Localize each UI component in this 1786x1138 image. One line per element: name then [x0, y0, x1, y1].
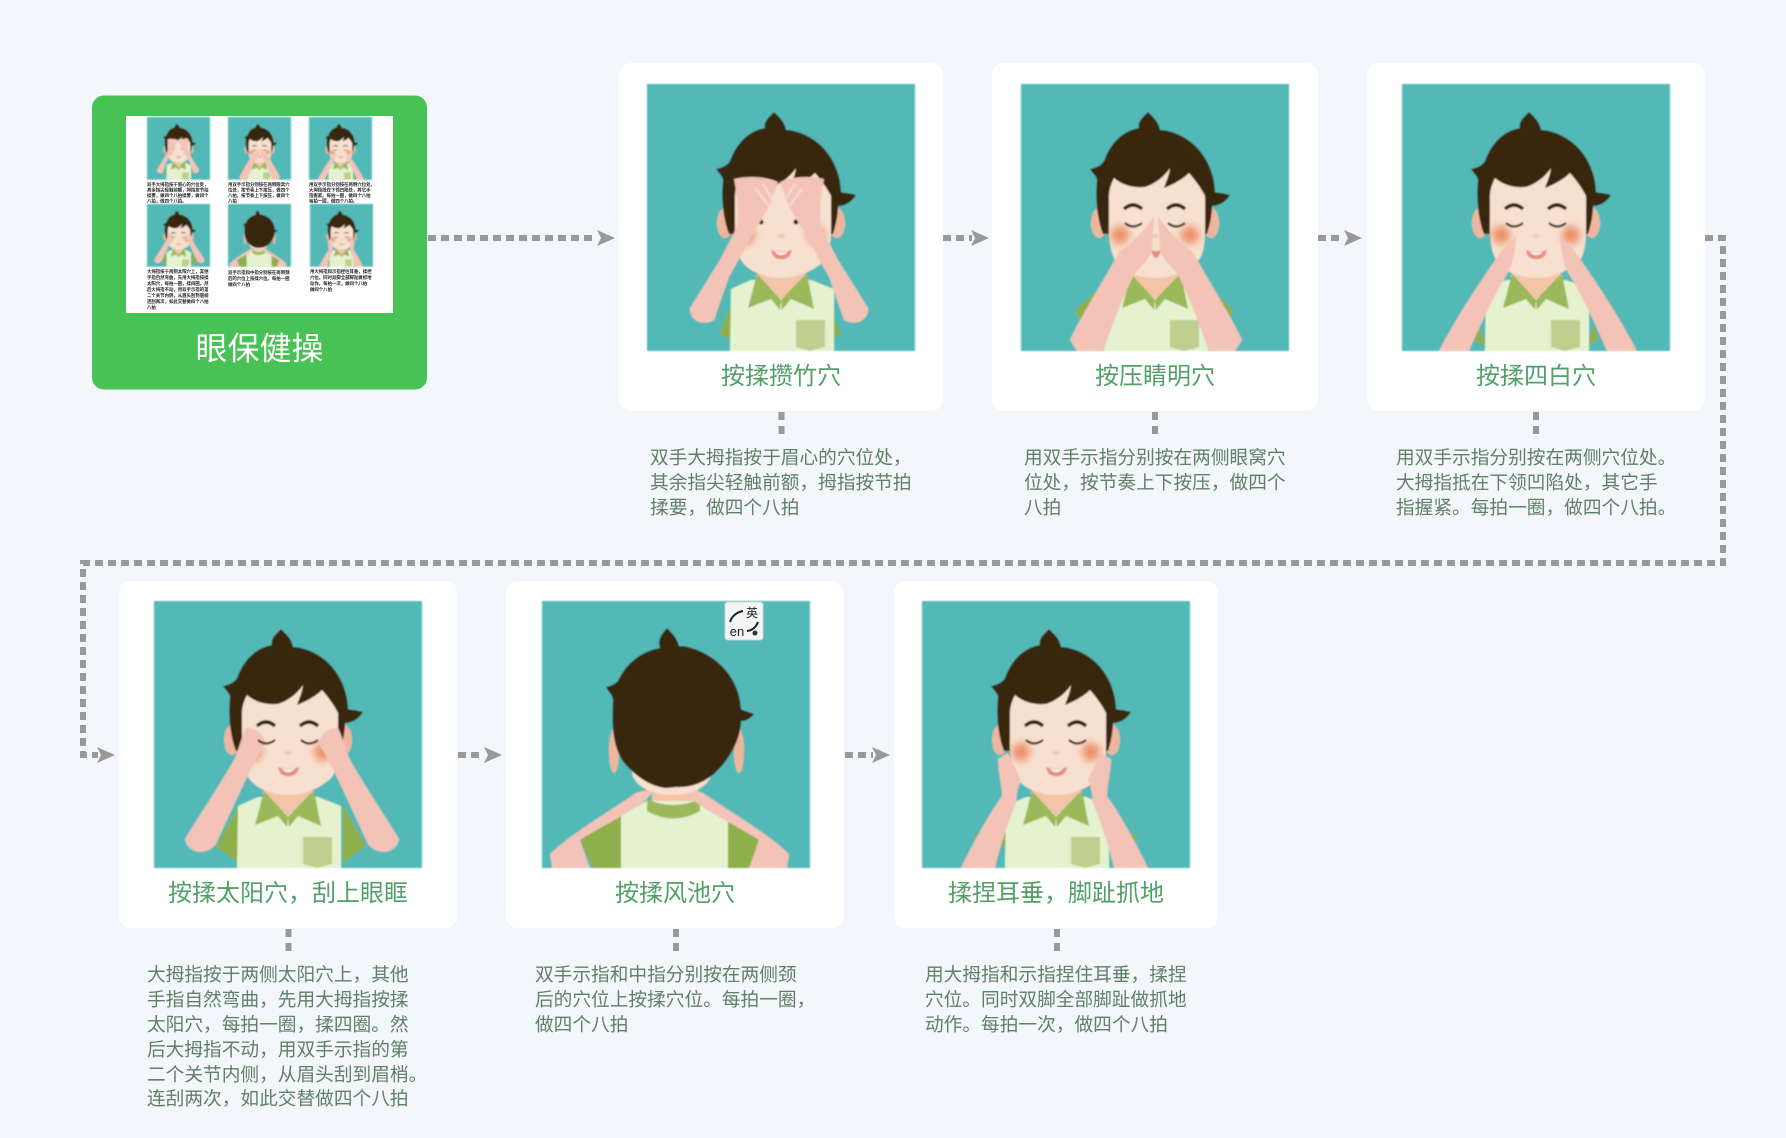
step title: 按揉风池穴 — [615, 880, 735, 907]
thumbnail overview: 八拍 — [228, 198, 237, 204]
thumbnail overview: 后的穴位上按揉穴位。每拍一圈 — [228, 275, 290, 282]
description: step 2: 八拍 — [1024, 497, 1061, 518]
description: step 1: 双手大拇指按于眉心的穴位处， — [650, 447, 912, 468]
panel: step 6 — [894, 581, 1218, 928]
thumbnail overview: 双手示指和中指分别按在两侧颈 — [228, 269, 290, 276]
thumbnail overview: 每拍一圈，做四个八拍。 — [309, 198, 357, 204]
description: step 3: 大拇指抵在下领凹陷处，其它手 — [1396, 472, 1658, 493]
description: step 3 — [1396, 447, 1676, 518]
panel: step 4 — [119, 581, 457, 928]
description: step 2: 位处，按节奏上下按压，做四个 — [1024, 472, 1286, 493]
description: step 3: 指握紧。每拍一圈，做四个八拍。 — [1396, 497, 1676, 518]
description: step 5 — [535, 964, 815, 1035]
description: step 6: 动作。每拍一次，做四个八拍 — [925, 1014, 1168, 1035]
thumbnail overview: 用双手示指分别按在两侧穴位处。 — [309, 181, 375, 188]
description: step 2 — [1024, 447, 1286, 518]
thumbnail overview: 位处，按节奏上下按压，做四个 — [228, 186, 290, 194]
thumbnail overview: 连刮两次，如此交替做四个八拍 — [147, 298, 209, 305]
description: step 4 — [147, 964, 427, 1109]
description: step 6: 用大拇指和示指捏住耳垂，揉捏 — [925, 964, 1187, 985]
thumbnail overview: 双手大拇指按于眉心的穴位处， — [147, 181, 208, 188]
thumbnail overview: 指握紧。每拍一圈，做四个八拍 — [309, 192, 371, 199]
thumbnail overview: 做四个八拍 — [228, 281, 251, 288]
description: step 5: 双手示指和中指分别按在两侧颈 — [535, 964, 797, 985]
thumbnail overview: 用双手示指分别按在两侧眼窝穴 — [228, 181, 290, 188]
step title: 按揉攒竹穴 — [721, 363, 841, 390]
thumbnail overview: 八拍，做四个八拍。 — [147, 198, 187, 204]
thumbnail overview — [126, 116, 393, 313]
thumbnail overview: 穴位。同时双脚全部脚趾做抓地 — [310, 274, 372, 281]
thumbnail overview: 大拇指抵在下领凹陷处，其它手 — [309, 186, 371, 194]
short connectors under cards — [288, 412, 1536, 951]
thumbnail overview: 八拍 — [147, 304, 156, 311]
arrowheads — [97, 230, 1362, 763]
illustration: press back of neck — [542, 601, 810, 868]
illustration: press temples — [154, 601, 422, 868]
panel: step 3 — [1367, 63, 1705, 411]
step title: 按揉四白穴 — [1476, 363, 1596, 390]
thumbnail overview: 动作。每拍一次，做四个八拍 — [310, 280, 368, 287]
thumbnail overview: 八拍。按节奏上下按压，做四个 — [228, 192, 290, 199]
description: step 1 — [650, 447, 912, 518]
title: 眼保健操 — [195, 330, 324, 366]
description: step 2: 用双手示指分别按在两侧眼窝穴 — [1024, 447, 1286, 468]
thumbnail overview: 揉要，做四个八拍揉要，做四个 — [147, 192, 209, 199]
description: step 4: 连刮两次，如此交替做四个八拍 — [147, 1088, 409, 1109]
icon: input method badge: en — [730, 624, 744, 639]
thumbnail overview: 做四个八拍 — [310, 286, 333, 293]
description: step 4: 太阳穴，每拍一圈，揉四圈。然 — [147, 1014, 409, 1035]
illustration: pinch earlobes — [922, 601, 1190, 868]
illustration: press between brows — [647, 84, 915, 351]
description: step 1: 揉要，做四个八拍 — [650, 497, 800, 518]
description: step 6 — [925, 964, 1187, 1035]
connector: flow arrows between cards — [83, 238, 1723, 755]
thumbnail overview: 后大拇指不动，用双手示指的第 — [147, 286, 209, 293]
thumbnail overview: 用大拇指和示指捏住耳垂，揉捏 — [310, 268, 372, 275]
description: step 4: 二个关节内侧，从眉头刮到眉梢。 — [147, 1064, 427, 1085]
illustration: press inner eye corners — [1021, 84, 1289, 351]
description: step 4: 后大拇指不动，用双手示指的第 — [147, 1039, 409, 1060]
thumbnail overview: 大拇指按于两侧太阳穴上，其他 — [147, 268, 209, 275]
panel: step 1 — [619, 63, 943, 411]
thumbnail overview: 二个关节内侧，从眉头刮到眉梢 — [147, 292, 209, 299]
icon: input method badge: 英 — [746, 606, 758, 620]
panel: title card — [92, 96, 427, 390]
step title: 揉捏耳垂，脚趾抓地 — [948, 880, 1164, 907]
illustration: press under eyes — [1402, 84, 1670, 351]
description: step 5: 后的穴位上按揉穴位。每拍一圈， — [535, 989, 815, 1010]
panel: step 2 — [992, 63, 1318, 411]
description: step 1: 其余指尖轻触前额，拇指按节拍 — [650, 472, 912, 493]
description: step 6: 穴位。同时双脚全部脚趾做抓地 — [925, 989, 1187, 1010]
step title: 按揉太阳穴，刮上眼眶 — [168, 880, 408, 907]
thumbnail overview: 太阳穴，每拍一圈，揉四圈。然 — [147, 280, 209, 287]
description: step 3: 用双手示指分别按在两侧穴位处。 — [1396, 447, 1676, 468]
description: step 5: 做四个八拍 — [535, 1014, 628, 1035]
panel: step 5 — [506, 581, 844, 928]
icon: input method badge — [725, 602, 763, 640]
description: step 4: 手指自然弯曲，先用大拇指按揉 — [147, 989, 409, 1010]
description: step 4: 大拇指按于两侧太阳穴上，其他 — [147, 964, 409, 985]
thumbnail overview: 手指自然弯曲，先用大拇指按揉 — [147, 274, 209, 281]
step title: 按压睛明穴 — [1095, 363, 1215, 390]
thumbnail overview: 其余指尖轻触前额，拇指按节拍 — [147, 186, 209, 194]
